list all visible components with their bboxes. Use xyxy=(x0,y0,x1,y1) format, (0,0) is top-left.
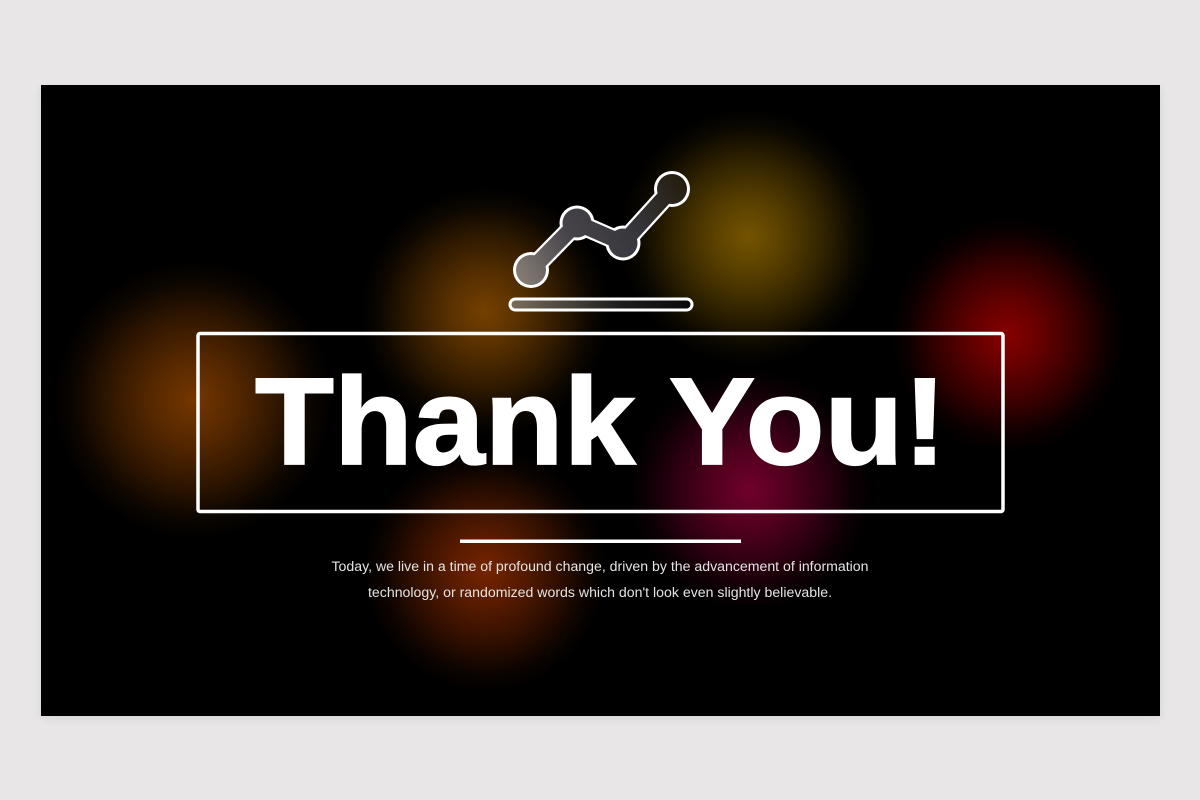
description text xyxy=(332,559,868,600)
description text: Today, we live in a time of profound change, driven by the advancement of information xyxy=(332,559,868,574)
divider xyxy=(460,540,741,543)
panel: black slide background xyxy=(41,85,1160,716)
icon: line chart xyxy=(513,171,690,288)
title frame xyxy=(198,334,1003,512)
description text: technology, or randomized words which don't look even slightly believable. xyxy=(368,585,832,600)
icon: chart baseline bar xyxy=(510,299,692,310)
glow circles xyxy=(53,109,1126,692)
title: Thank You! xyxy=(255,351,946,490)
slide shadow xyxy=(41,88,1160,718)
